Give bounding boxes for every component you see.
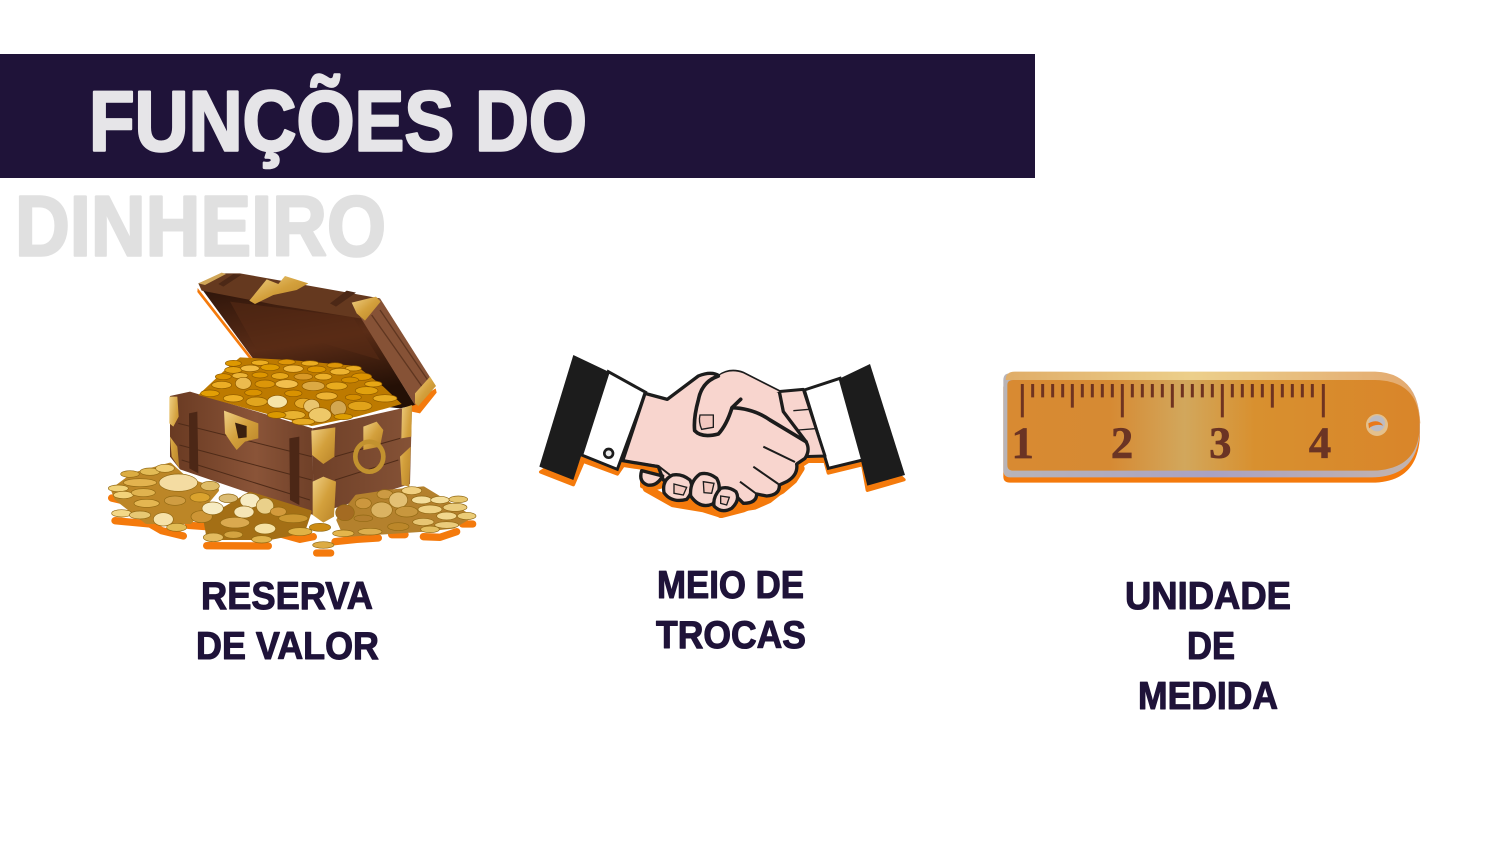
- ruler face: [1007, 380, 1420, 471]
- label: reserva de valor: [196, 575, 379, 668]
- title banner: [0, 54, 1035, 178]
- left sleeve: [539, 355, 608, 480]
- chest side face: [313, 406, 412, 515]
- ruler numbers: 4: [1309, 418, 1331, 468]
- chest handle: [363, 422, 383, 450]
- cufflink: [604, 449, 613, 458]
- lid metal corners: [198, 273, 226, 285]
- thumb: [694, 371, 779, 436]
- thumb outline: [694, 376, 806, 442]
- label: unidade de medida: DE: [1187, 625, 1235, 668]
- chest front face: [170, 392, 313, 515]
- ruler numbers: 2: [1111, 418, 1133, 468]
- label: unidade de medida: UNIDADE: [1125, 575, 1291, 618]
- lid side: [360, 298, 435, 405]
- label: meio de trocas: TROCAS: [656, 614, 806, 657]
- chest metal fittings: [169, 397, 179, 468]
- ruler numbers: [1012, 418, 1331, 468]
- chest lock: [224, 411, 258, 450]
- right wrist: [763, 389, 825, 457]
- ruler hole: [1366, 414, 1388, 436]
- ruler silver edge: [1003, 373, 1420, 477]
- title: second line: DINHEIRO: [15, 180, 386, 274]
- right cuff: [804, 378, 863, 468]
- orange coin shadows: [112, 498, 473, 553]
- orange shadow: [541, 411, 904, 516]
- ruler top bevel: [1006, 372, 1420, 423]
- fingers: [641, 471, 738, 511]
- coin heap in chest: [198, 357, 402, 426]
- hand creases: [623, 447, 795, 494]
- ruler ticks: [1022, 384, 1323, 417]
- title: first line: FUNÇÕES DO: [89, 74, 587, 170]
- icon: ruler: [1003, 372, 1420, 483]
- lid rim: [198, 273, 380, 318]
- label: meio de trocas: [656, 564, 806, 657]
- label: reserva de valor: DE VALOR: [196, 625, 379, 668]
- ruler numbers: 1: [1012, 418, 1034, 468]
- loose coins: [108, 464, 476, 548]
- ruler numbers: 3: [1209, 418, 1231, 468]
- label: unidade de medida: [1125, 575, 1291, 718]
- icon: handshake: [539, 355, 905, 516]
- icon: treasure chest with gold coins: [108, 273, 476, 553]
- right sleeve: [840, 364, 905, 486]
- finger nails: [674, 482, 729, 505]
- label: reserva de valor: RESERVA: [201, 575, 373, 618]
- label: unidade de medida: MEDIDA: [1138, 675, 1278, 718]
- thumb nail: [699, 415, 713, 429]
- orange shadow under fingers: [647, 468, 801, 514]
- label: meio de trocas: MEIO DE: [657, 564, 804, 607]
- lid underside: [201, 287, 415, 408]
- left cuff: [582, 372, 646, 469]
- wood grooves: [178, 423, 400, 500]
- ruler orange shadow: [1003, 380, 1420, 483]
- clasped hands: [623, 371, 808, 503]
- lid shadow: [197, 288, 437, 413]
